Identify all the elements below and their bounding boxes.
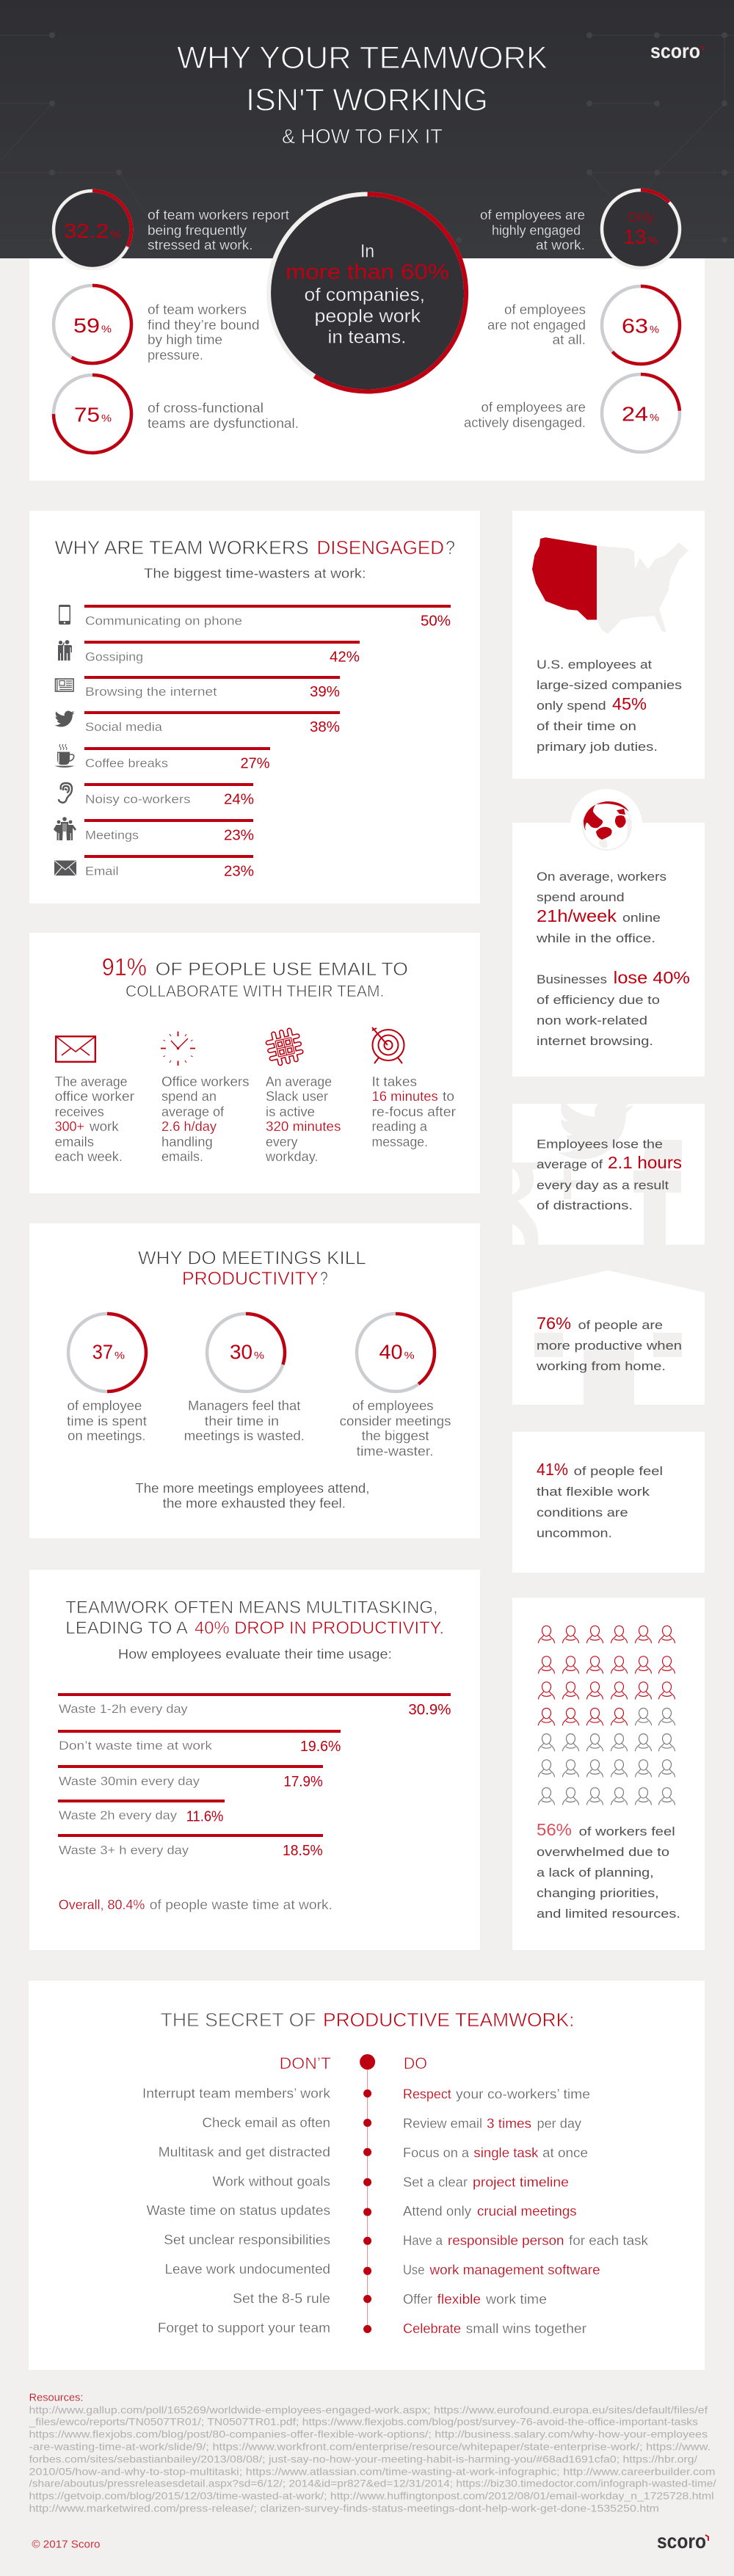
stat: only 13% engaged: highly engaged: [492, 223, 581, 238]
stat: 30% wasted: Managers feel that: [188, 1399, 300, 1413]
heading: [138, 1248, 366, 1289]
stat: 37% time on meetings: 37: [92, 1341, 113, 1364]
panel: email collaboration: [29, 933, 480, 1193]
column: don't: Work without goals: [213, 2174, 330, 2188]
text: 2.1 hours lost: every day as a result: [537, 1179, 669, 1193]
panel: hero header and team statistics: [0, 0, 734, 481]
stat: 37% time on meetings: of employee: [68, 1399, 142, 1413]
column: do: Focus on a: [403, 2145, 470, 2160]
column: slack minutes: workday.: [265, 1149, 319, 1164]
column: do: responsible person: [448, 2233, 564, 2248]
stat: only 13% engaged: of employees are: [480, 208, 585, 222]
column: refocus time: 16 minutes: [371, 1089, 438, 1104]
stat: 59% time pressure: by high time: [148, 332, 222, 347]
heading: 40% DROP IN PRODUCTIVITY.: [195, 1618, 444, 1638]
bar chart: time-wasters: 23%: [224, 828, 254, 844]
stat: 40% biggest time-waster: of employees: [352, 1399, 434, 1413]
text: 41% uncommon: conditions are: [537, 1506, 628, 1519]
heading: TEAMWORK OFTEN MEANS MULTITASKING,: [65, 1598, 438, 1618]
text: 41% uncommon: that flexible work: [537, 1485, 650, 1499]
text: 56% overwhelmed: and limited resources.: [537, 1907, 680, 1921]
column: refocus time: to: [443, 1089, 454, 1104]
title: & HOW TO FIX IT: [282, 125, 443, 148]
bar chart: time usage: Waste 2h every day: [59, 1808, 178, 1822]
icon: slack hash: [266, 1029, 302, 1065]
column: hours per day: handling: [161, 1135, 213, 1149]
column: don't: Set the 8-5 rule: [233, 2291, 330, 2306]
column: emails per week: each week.: [55, 1149, 123, 1164]
column: do: Have a: [403, 2233, 443, 2248]
column: hours per day: spend an: [161, 1089, 217, 1104]
panel: meetings: [29, 1223, 480, 1538]
stat: 63% not engaged: 63: [622, 314, 648, 338]
text: 76% more productive: 76%: [537, 1314, 571, 1333]
stat: 37% time on meetings: time is spent: [67, 1414, 147, 1429]
icon: newspaper: [56, 679, 73, 691]
stat: 59% time pressure: 59: [73, 314, 100, 337]
text: 21h/week online and lose 40%: Businesses: [537, 972, 607, 986]
text: closing remark: [135, 1481, 370, 1511]
text: 41% uncommon: uncommon.: [537, 1527, 612, 1540]
stat: 30% wasted: meetings is wasted.: [184, 1429, 305, 1444]
text: 56% overwhelmed: of workers feel: [579, 1824, 675, 1838]
column: don't: Forget to support your team: [158, 2321, 330, 2335]
stat: 75% dysfunctional: %: [101, 412, 112, 424]
bar chart: time-wasters: [84, 605, 451, 880]
stat: 75% dysfunctional: teams are dysfunctional.: [148, 416, 299, 431]
stat: 59% time pressure: of team workers: [148, 302, 247, 317]
column: don't: Set unclear responsibilities: [164, 2233, 330, 2247]
central circle: more than 60%: more than 60%: [286, 261, 449, 284]
column: hours per day: [161, 1032, 250, 1164]
bar chart: time usage: Waste 3+ h every day: [59, 1843, 189, 1857]
column: emails per week: The average: [55, 1074, 128, 1089]
stat: 63% not engaged: [487, 286, 680, 364]
bar chart: time usage: 18.5%: [283, 1843, 323, 1859]
text: 2.1 hours lost: 2.1 hours: [608, 1153, 682, 1172]
column: emails per week: receives: [55, 1105, 104, 1119]
heading: OF PEOPLE USE EMAIL TO: [156, 959, 408, 980]
resources: _files/ewco/reports/TN0507TR01/; TN0507TR01.pdf; https://www.flexjobs.com/blog/post/survey-76-avoid-the-office-important-tasks: [28, 2416, 698, 2428]
column: emails per week: office worker: [55, 1089, 134, 1104]
text: 56% overwhelmed: 56%: [537, 1820, 572, 1839]
bar chart: time usage: Don’t waste time at work: [59, 1739, 213, 1753]
column: do: Offer: [403, 2292, 432, 2307]
logo: scoro: scoro: [650, 40, 700, 62]
column: do: Set a clear: [403, 2175, 468, 2189]
column: do: per day: [537, 2116, 581, 2131]
column: don't: Waste time on status updates: [147, 2203, 330, 2218]
stat: 30% wasted: %: [254, 1350, 264, 1361]
bar chart: time-wasters: Coffee breaks: [85, 756, 168, 771]
bar chart: time usage: 19.6%: [300, 1739, 341, 1755]
central circle: more than 60%: [269, 194, 466, 392]
copyright: © 2017 Scoro: [32, 2539, 100, 2551]
text: 56% overwhelmed: [537, 1820, 680, 1921]
text: overall 80.4%: Overall, 80.4%: [59, 1897, 145, 1912]
bar chart: time-wasters: 27%: [241, 756, 270, 772]
column: slack minutes: Slack user: [266, 1089, 328, 1104]
bar chart: time usage: Waste 1-2h every day: [59, 1702, 188, 1716]
text: 76% more productive: working from home.: [536, 1359, 666, 1373]
central circle: more than 60%: of companies,: [304, 285, 425, 305]
stat: 37% time on meetings: %: [115, 1350, 125, 1361]
column: refocus time: message.: [371, 1135, 428, 1149]
stat: 32.2% stressed: [54, 191, 289, 269]
column: refocus time: It takes: [371, 1074, 417, 1089]
column: slack minutes: [265, 1029, 341, 1164]
subheading: How employees evaluate their time usage:: [118, 1647, 392, 1662]
text: 56% overwhelmed: changing priorities,: [537, 1886, 659, 1900]
heading: ?: [446, 536, 455, 559]
bar chart: time usage: [58, 1693, 451, 1859]
column: do: 3 times: [487, 2116, 531, 2131]
heading: PRODUCTIVITY: [182, 1269, 319, 1289]
bar chart: time-wasters: Browsing the internet: [85, 685, 217, 699]
stat: 40% biggest time-waster: the biggest: [362, 1429, 429, 1444]
column: do: DO: [404, 2054, 427, 2073]
panel: overwhelmed workers: [512, 1598, 705, 1950]
icon: ear: [59, 783, 72, 803]
text: closing remark: the more exhausted they feel.: [163, 1496, 346, 1511]
text: 45% on primary duties: 45%: [612, 694, 647, 713]
stat: 32.2% stressed: being frequently: [148, 223, 247, 238]
stat: only 13% engaged: 13: [624, 225, 646, 248]
stat: 63% not engaged: are not engaged: [487, 318, 586, 332]
text: closing remark: The more meetings employees attend,: [135, 1481, 370, 1496]
heading: LEADING TO A: [65, 1618, 188, 1638]
text: 21h/week online and lose 40%: spend around: [537, 890, 625, 904]
panel: work from home house: [512, 1270, 705, 1405]
heading: COLLABORATE WITH THEIR TEAM.: [126, 982, 384, 1000]
title: [177, 40, 548, 148]
text: 21h/week online and lose 40%: while in the office.: [536, 931, 655, 945]
text: 76% more productive: of people are: [578, 1318, 663, 1332]
column: hours per day: Office workers: [161, 1074, 250, 1089]
column: slack minutes: 320 minutes: [266, 1119, 341, 1134]
column: do: Celebrate: [403, 2321, 461, 2336]
column: refocus time: reading a: [371, 1119, 428, 1134]
text: 45% on primary duties: of their time on: [537, 719, 636, 733]
icon: envelope: [56, 1036, 95, 1062]
stat: only 13% engaged: Only: [628, 210, 654, 225]
text: 76% more productive: [536, 1314, 682, 1373]
text: 21h/week online and lose 40%: [536, 870, 690, 1048]
heading: WHY ARE TEAM WORKERS: [55, 536, 309, 559]
column: refocus time: re-focus after: [371, 1105, 456, 1119]
bar chart: time usage: 11.6%: [186, 1808, 224, 1824]
stat: 59% time pressure: pressure.: [148, 348, 203, 363]
stat: 30% wasted: [184, 1314, 305, 1444]
text: 21h/week online and lose 40%: lose 40%: [614, 968, 690, 987]
stat: 59% time pressure: [54, 285, 260, 363]
text: 45% on primary duties: [537, 658, 682, 754]
column: do: flexible: [437, 2292, 481, 2307]
stat: 32.2% stressed: stressed at work.: [148, 238, 252, 252]
column: slack minutes: An average: [266, 1074, 332, 1089]
column: don't: Interrupt team members’ work: [142, 2086, 331, 2100]
column: slack minutes: is active: [266, 1105, 315, 1119]
text: 2.1 hours lost: average of: [537, 1157, 603, 1171]
stat: 24% disengaged: of employees are: [482, 400, 586, 415]
stat: 32.2% stressed: of team workers report: [148, 208, 289, 222]
stat: 30% wasted: 30: [230, 1341, 252, 1364]
panel: flexible work: [512, 1432, 705, 1573]
column: do: single task: [473, 2145, 539, 2160]
column: do: project timeline: [473, 2175, 569, 2189]
column: do: work management software: [429, 2263, 600, 2277]
column: refocus time: [371, 1027, 456, 1149]
stat: only 13% engaged: [480, 190, 680, 268]
column: emails per week: [55, 1036, 134, 1164]
text: 21h/week online and lose 40%: online: [622, 911, 661, 925]
panel: multitasking: [29, 1570, 480, 1950]
heading: 91%: [102, 953, 147, 980]
resources: https://www.flexjobs.com/blog/post/80-companies-offer-flexible-work-options/; http://business.salary.com/why-how-your-employees: [29, 2428, 708, 2440]
column: don't: Leave work undocumented: [164, 2262, 330, 2277]
text: overall 80.4%: [59, 1897, 333, 1912]
bar chart: time-wasters: Gossiping: [85, 650, 143, 663]
column: hours per day: emails.: [161, 1149, 203, 1164]
heading: THE SECRET OF: [161, 2009, 316, 2031]
bar chart: time-wasters: Noisy co-workers: [85, 793, 191, 806]
stat: 63% not engaged: of employees: [504, 302, 586, 317]
text: 21h/week online and lose 40%: internet browsing.: [537, 1034, 653, 1048]
icon: coffee cup: [55, 744, 75, 768]
stat: 37% time on meetings: on meetings.: [68, 1429, 146, 1444]
stat: 59% time pressure: %: [101, 323, 112, 335]
icon: clock: [161, 1032, 195, 1066]
bar chart: time-wasters: 42%: [330, 650, 360, 666]
column: do: for each task: [569, 2233, 649, 2248]
column: do: Respect: [403, 2086, 451, 2101]
text: 45% on primary duties: only spend: [537, 699, 606, 713]
subheading: The biggest time-wasters at work:: [144, 567, 366, 581]
bar chart: time-wasters: Communicating on phone: [85, 614, 242, 627]
central circle: more than 60%: In: [360, 241, 374, 261]
icon: phone: [59, 605, 70, 625]
column: don't: [142, 2054, 331, 2335]
bar chart: time-wasters: Meetings: [85, 828, 139, 843]
text: 45% on primary duties: U.S. employees at: [537, 658, 652, 672]
column: don't: DON’T: [280, 2054, 331, 2073]
stat: 75% dysfunctional: [54, 375, 299, 453]
stat: 24% disengaged: [464, 374, 680, 452]
column: emails per week: work: [89, 1119, 120, 1134]
text: 56% overwhelmed: a lack of planning,: [537, 1866, 654, 1880]
text: 56% overwhelmed: overwhelmed due to: [537, 1845, 669, 1859]
heading: DISENGAGED: [317, 536, 444, 559]
heading: WHY DO MEETINGS KILL: [138, 1248, 366, 1269]
stat: only 13% engaged: at work.: [536, 238, 585, 252]
column: do: Use: [403, 2263, 424, 2277]
text: 21h/week online and lose 40%: non work-related: [537, 1014, 647, 1027]
bar chart: time-wasters: Email: [85, 864, 119, 878]
title: WHY YOUR TEAMWORK: [177, 40, 548, 76]
heading: [55, 536, 455, 559]
column: emails per week: 300+: [55, 1119, 84, 1134]
stat: 32.2% stressed: 32.2: [64, 219, 109, 242]
bar chart: time-wasters: Social media: [85, 720, 163, 734]
column: do: crucial meetings: [477, 2204, 577, 2219]
panel: map US employees: [512, 511, 705, 779]
text: 21h/week online and lose 40%: 21h/week: [537, 906, 617, 925]
stat: 40% biggest time-waster: 40: [379, 1341, 403, 1364]
stat: 24% disengaged: 24: [622, 402, 648, 426]
title: ISN'T WORKING: [246, 82, 488, 117]
heading: [161, 2009, 574, 2031]
column: do: work time: [485, 2292, 547, 2307]
stat: 24% disengaged: %: [650, 411, 659, 423]
map: USA with west half highlighted: [532, 537, 688, 634]
resources: /share/aboutus/pressreleasesdetail.aspx?sd=6/12/; 2014&id=pr827&ed=12/31/2014; https://biz30.timedoctor.com/infograph-wasted-time/: [29, 2478, 716, 2489]
bar chart: time usage: 17.9%: [283, 1774, 323, 1790]
text: 76% more productive: more productive when: [537, 1339, 682, 1353]
central circle: more than 60%: in teams.: [327, 327, 407, 348]
icons: faint social media watermarks: [512, 1098, 682, 1245]
stat: 32.2% stressed: %: [110, 228, 121, 240]
bar chart: time-wasters: 23%: [224, 864, 254, 880]
column: do: at once: [542, 2145, 588, 2160]
resources: [28, 2392, 716, 2514]
text: 2.1 hours lost: [537, 1138, 682, 1212]
column: emails per week: emails: [55, 1135, 94, 1149]
resources: 2010/05/how-and-why-to-stop-multitaski; https://www.atlassian.com/time-wasting-at-work-infographic; http://www.careerbuilder.com: [29, 2466, 715, 2478]
bar chart: time-wasters: 50%: [421, 614, 451, 630]
stat: 40% biggest time-waster: time-waster.: [357, 1444, 434, 1459]
bar chart: time-wasters: 24%: [224, 792, 254, 808]
text: 41% uncommon: 41%: [537, 1460, 568, 1479]
column: hours per day: average of: [161, 1105, 225, 1119]
column: do: Review email: [403, 2116, 482, 2131]
column: do: [403, 2054, 649, 2336]
icon: gossiping people: [58, 640, 72, 661]
text: 2.1 hours lost: Employees lose the: [537, 1138, 663, 1151]
resources: Resources:: [29, 2392, 84, 2404]
heading: ?: [320, 1269, 328, 1289]
text: overall 80.4%: of people waste time at work.: [150, 1897, 333, 1912]
bar chart: time-wasters: 39%: [310, 684, 340, 700]
resources: http://www.marketwired.com/press-release/; clarizen-survey-finds-status-meetings-dont-help-work-get-done-1535250.htm: [29, 2503, 659, 2514]
column: don't: Multitask and get distracted: [159, 2144, 330, 2159]
text: 21h/week online and lose 40%: of efficiency due to: [537, 993, 660, 1007]
text: 41% uncommon: [537, 1460, 663, 1540]
stat: 63% not engaged: at all.: [552, 332, 586, 347]
panel: secret of productive teamwork: [29, 1981, 705, 2370]
text: 45% on primary duties: large-sized companies: [537, 678, 682, 692]
icon: twitter bird: [55, 711, 74, 727]
text: 2.1 hours lost: of distractions.: [537, 1198, 633, 1212]
text: 45% on primary duties: primary job duties.: [537, 740, 658, 754]
bar chart: time usage: 30.9%: [408, 1702, 451, 1718]
resources: -are-wasting-time-at-work/slide/9/; https://www.workfront.com/enterprise/resource/whitepaper/state-enterprise-work/; https://www.: [29, 2441, 711, 2453]
resources: forbes.com/sites/sebastianbailey/2013/08/08/; just-say-no-how-your-meeting-habit-is-harming-you/#68ad1691cfa0; https://hbr.org/: [29, 2453, 697, 2465]
stat: 30% wasted: their time in: [205, 1414, 279, 1429]
resources: http://www.gallup.com/poll/165269/worldwide-employees-engaged-work.aspx; https://www.eurofound.europa.eu/sites/default/files/ef: [29, 2404, 708, 2415]
stat: 59% time pressure: find they’re bound: [148, 318, 260, 332]
stat: only 13% engaged: %: [648, 234, 658, 246]
bar chart: time-wasters: 38%: [310, 719, 340, 735]
icon: meeting group: [54, 817, 76, 840]
panel: online at the office: [512, 789, 705, 1077]
timeline spine: [360, 2054, 375, 2333]
central circle: more than 60%: people work: [314, 306, 421, 327]
stat: 24% disengaged: actively disengaged.: [464, 415, 586, 430]
stat: 40% biggest time-waster: consider meetings: [340, 1414, 451, 1429]
text: 41% uncommon: of people feel: [574, 1464, 663, 1478]
stat: 40% biggest time-waster: %: [404, 1350, 415, 1361]
panel: why disengaged: [29, 511, 480, 903]
column: do: your co-workers’ time: [456, 2086, 590, 2101]
icon: globe: [583, 801, 631, 850]
stat: 37% time on meetings: [67, 1314, 147, 1444]
stat: 75% dysfunctional: of cross-functional: [148, 401, 264, 415]
text: 21h/week online and lose 40%: On average, workers: [537, 870, 666, 884]
heading: [102, 953, 408, 1000]
column: don't: Check email as often: [203, 2115, 330, 2130]
column: do: small wins together: [466, 2321, 586, 2336]
heading: PRODUCTIVE TEAMWORK:: [323, 2009, 574, 2031]
heading: [65, 1598, 444, 1638]
stat: 75% dysfunctional: 75: [74, 404, 100, 426]
bar chart: time usage: Waste 30min every day: [59, 1775, 200, 1788]
panel: distractions: [512, 1098, 705, 1245]
logo: scoro footer: scoro: [657, 2530, 706, 2553]
icon grid: people pictogram: [538, 1626, 675, 1805]
column: hours per day: 2.6 h/day: [161, 1119, 217, 1134]
icon: email envelope: [54, 860, 76, 876]
column: do: Attend only: [403, 2204, 471, 2219]
resources: https://getvoip.com/blog/2015/12/03/time-wasted-at-work/; http://www.huffingtonpost.com/2012/08/01/email-workday_n_1725728.html: [29, 2490, 714, 2502]
column: slack minutes: every: [266, 1135, 298, 1149]
stat: 63% not engaged: %: [650, 323, 659, 335]
icon: target: [372, 1027, 404, 1063]
stat: 40% biggest time-waster: [340, 1314, 451, 1459]
